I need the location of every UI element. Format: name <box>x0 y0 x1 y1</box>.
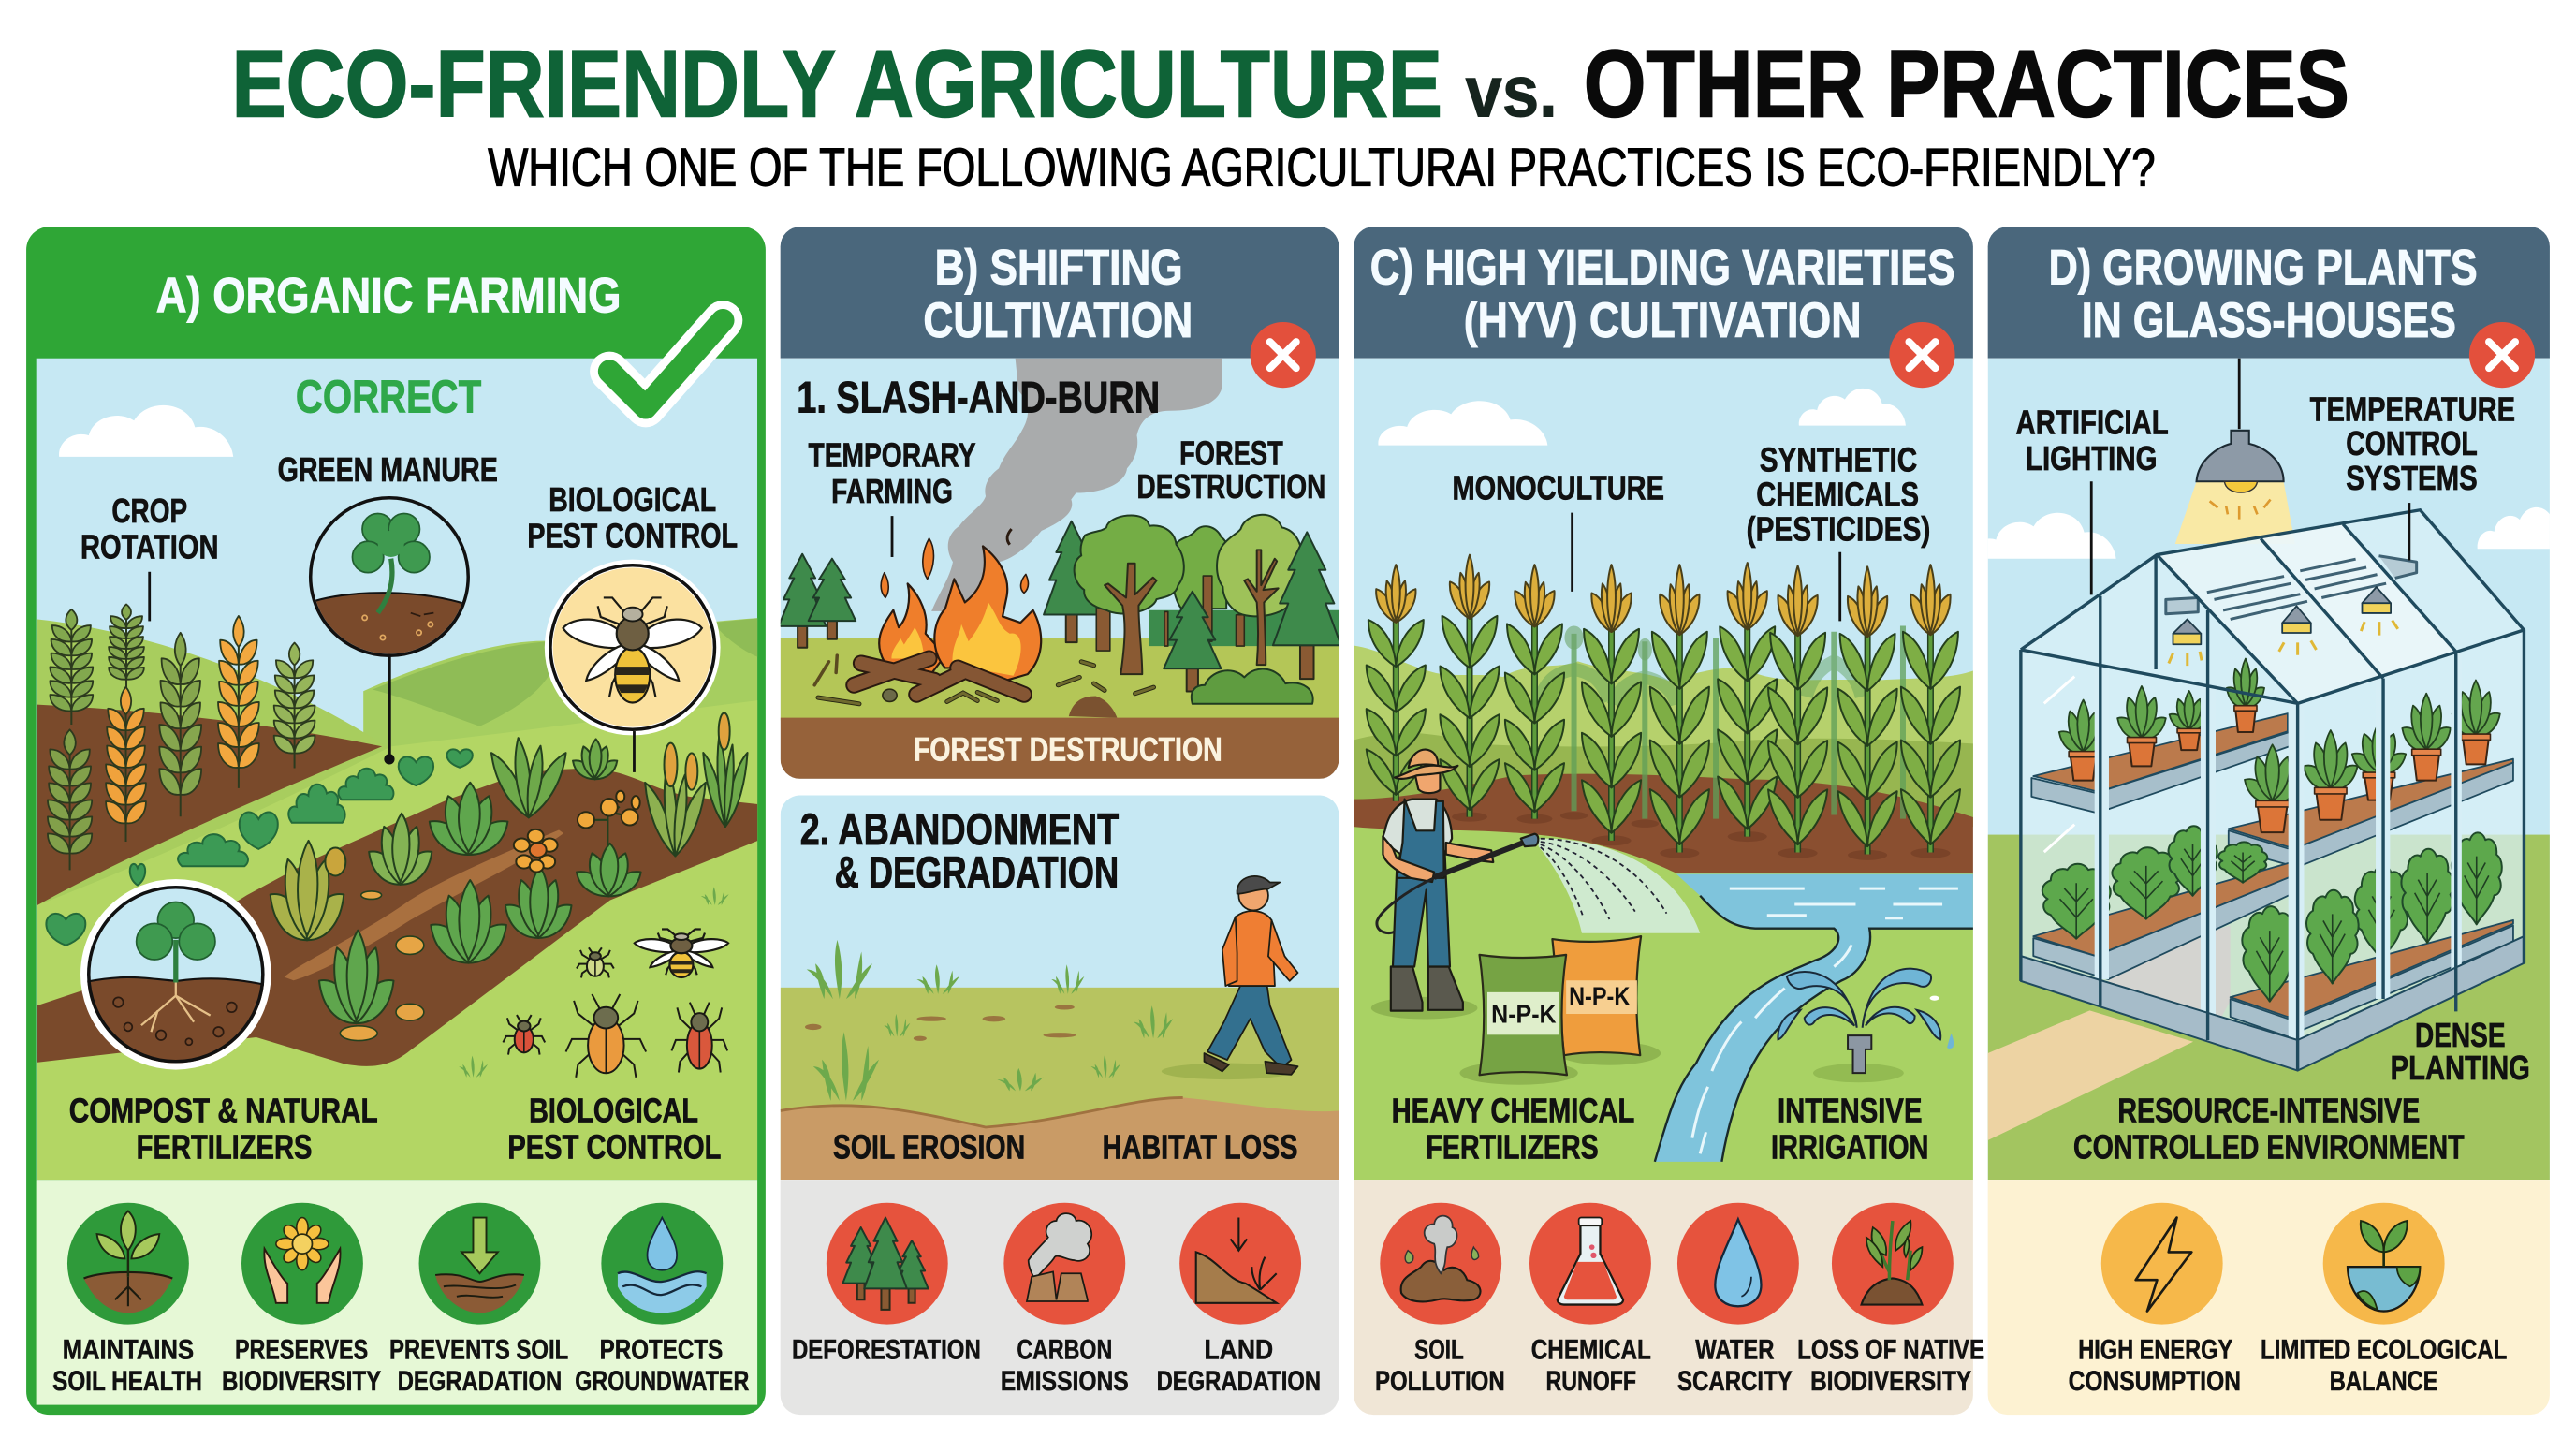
panel C impacts strip <box>1354 1180 1984 1415</box>
label: forest destruction: DESTRUCTION <box>1137 467 1325 506</box>
impact labels: SOIL <box>1414 1334 1464 1365</box>
panel: B shifting cultivation <box>779 227 1341 1415</box>
panel B header: CULTIVATION <box>923 293 1193 348</box>
label: intensive irrigation <box>1771 1092 1928 1166</box>
label: heavy chemical fertilizers: FERTILIZERS <box>1426 1127 1599 1166</box>
frame <box>2021 510 2524 1071</box>
panel C header: C) HIGH YIELDING VARIETIES <box>1370 241 1955 296</box>
label: monoculture: MONOCULTURE <box>1453 469 1664 507</box>
abandonment scene <box>781 795 1339 1180</box>
impact labels: LAND <box>1204 1334 1273 1365</box>
label: intensive irrigation: INTENSIVE <box>1778 1092 1922 1130</box>
label: compost and natural fertilizers: FERTILIZERS <box>137 1127 312 1166</box>
logs <box>814 655 1153 704</box>
label: temperature control systems: TEMPERATURE <box>2310 389 2515 428</box>
label: forest destruction strip: FOREST DESTRUCTION <box>914 732 1222 769</box>
lettuce rows <box>2042 826 2502 1002</box>
panel: A organic farming <box>26 227 766 1415</box>
panel A scene <box>37 359 764 1201</box>
fertilizer bags: N-P-K <box>1491 1000 1557 1029</box>
icon: deforestation <box>827 1203 948 1325</box>
icon: soil pollution <box>1380 1203 1501 1325</box>
impact labels: CHEMICAL <box>1531 1334 1651 1365</box>
label: temporary farming: TEMPORARY <box>809 435 976 474</box>
label: heavy chemical fertilizers <box>1392 1092 1634 1166</box>
label: crop rotation: CROP <box>111 492 187 530</box>
hanging lamps <box>2169 587 2398 666</box>
impact labels: CARBON <box>1017 1334 1112 1365</box>
impact labels: CONSUMPTION <box>2069 1366 2241 1397</box>
icon: maintains soil health <box>67 1203 189 1325</box>
label: temperature control systems <box>2310 389 2515 560</box>
label: synthetic chemicals: SYNTHETIC <box>1760 441 1917 479</box>
soil patches <box>805 1005 1076 1041</box>
label: forest destruction <box>1137 434 1325 506</box>
impact labels: LOSS OF NATIVE <box>1797 1334 1984 1365</box>
label: biological pest control: PEST CONTROL <box>527 516 738 554</box>
label: resource intensive environment <box>2073 1092 2465 1166</box>
ceiling lamp <box>2197 359 2284 520</box>
heading: abandonment and degradation <box>800 805 1119 898</box>
label: intensive irrigation: IRRIGATION <box>1771 1127 1928 1166</box>
panel D header <box>2049 241 2478 348</box>
panel D header: D) GROWING PLANTS <box>2049 241 2478 296</box>
benefit labels: PRESERVES <box>235 1334 368 1365</box>
benefit labels: BIODIVERSITY <box>222 1366 381 1397</box>
label: artificial lighting: ARTIFICIAL <box>2016 403 2169 441</box>
benefit labels: MAINTAINS <box>63 1334 194 1365</box>
label: dense planting: PLANTING <box>2391 1049 2530 1087</box>
icon: limited ecological balance <box>2323 1203 2445 1325</box>
icon: red x <box>1889 322 1955 388</box>
person walking <box>1204 876 1298 1075</box>
label: temperature control systems: CONTROL <box>2346 424 2478 462</box>
panel C scene <box>1354 358 1973 1180</box>
glass mullion highlights <box>2095 653 2462 1040</box>
smoke <box>931 359 1222 611</box>
icon: red x <box>2469 322 2535 388</box>
icon: clover circle <box>309 496 470 657</box>
impact labels: SCARCITY <box>1677 1366 1793 1397</box>
impact labels: BALANCE <box>2330 1366 2438 1397</box>
greenhouse <box>2021 510 2524 1071</box>
correct label: CORRECT <box>296 373 481 423</box>
benefit labels: DEGRADATION <box>398 1366 562 1397</box>
icon: red x <box>1251 322 1316 388</box>
label: biological pest control <box>527 480 738 554</box>
icon: chemical runoff <box>1530 1203 1651 1325</box>
label: crop rotation <box>80 492 218 621</box>
panel B header: B) SHIFTING <box>935 241 1183 296</box>
label: temporary farming: FARMING <box>831 472 953 510</box>
label: forest destruction: FOREST <box>1179 434 1283 473</box>
panel: D glass houses <box>1971 227 2576 1415</box>
benefit labels <box>52 1334 749 1397</box>
insects <box>459 887 729 1078</box>
light cone <box>2175 481 2295 544</box>
heading: slash and burn: 1. SLASH-AND-BURN <box>797 374 1160 423</box>
farmer spraying <box>1371 750 1538 1019</box>
label: resource intensive environment: CONTROLLED ENVIRONMENT <box>2073 1127 2465 1166</box>
impact labels: HIGH ENERGY <box>2078 1334 2232 1365</box>
panel C header: (HYV) CULTIVATION <box>1464 293 1862 348</box>
impact labels <box>2069 1334 2507 1397</box>
panel B impacts strip <box>781 1180 1339 1415</box>
label: biological pest control lower <box>507 1092 721 1166</box>
fertilizer bags: N-P-K <box>1569 981 1630 1010</box>
icon: land degradation <box>1179 1203 1301 1325</box>
label: dense planting: DENSE <box>2415 1016 2506 1054</box>
label: synthetic chemicals: (PESTICIDES) <box>1747 509 1930 548</box>
label: dense planting <box>2391 1016 2530 1087</box>
forest trees <box>779 515 1341 704</box>
shelves lower <box>2033 863 2513 1036</box>
benefit labels: PROTECTS <box>600 1334 723 1365</box>
benefit labels: PREVENTS SOIL <box>389 1334 568 1365</box>
icon: compost soil circle <box>82 882 271 1068</box>
panel B header <box>923 241 1193 348</box>
leader: green manure <box>384 655 395 764</box>
label: crop rotation: ROTATION <box>80 528 218 566</box>
icon: bee circle <box>549 564 716 772</box>
crop rotation plants <box>48 604 315 870</box>
sprinkler <box>1778 969 1954 1082</box>
icon: check mark <box>609 320 723 407</box>
heading: abandonment and degradation: 2. ABANDONMENT <box>800 805 1119 855</box>
label: temporary farming <box>809 435 976 557</box>
panel A header: A) ORGANIC FARMING <box>156 268 621 323</box>
icon: protects groundwater <box>601 1203 723 1325</box>
label: synthetic chemicals <box>1747 441 1930 621</box>
title: OTHER PRACTICES <box>1584 31 2349 138</box>
label: biological pest control lower: BIOLOGICAL <box>529 1092 698 1130</box>
label: resource intensive environment: RESOURCE-INTENSIVE <box>2117 1092 2420 1130</box>
impact labels: DEGRADATION <box>1157 1366 1321 1397</box>
label: temperature control systems: SYSTEMS <box>2346 459 2478 497</box>
icon: loss of native biodiversity <box>1832 1203 1954 1325</box>
label: artificial lighting <box>2016 403 2169 594</box>
background corn <box>1539 625 1903 819</box>
icon: carbon emissions <box>1003 1203 1125 1325</box>
impact labels: WATER <box>1695 1334 1775 1365</box>
subtitle question: WHICH ONE OF THE FOLLOWING AGRICULTURAI PRACTICES IS ECO-FRIENDLY? <box>488 138 2156 198</box>
title <box>231 31 2349 138</box>
fertilizer bags <box>1459 936 1661 1085</box>
icon: high energy <box>2101 1203 2223 1325</box>
panel: C high yielding varieties <box>1354 227 1984 1415</box>
heading: abandonment and degradation: & DEGRADATION <box>835 848 1119 898</box>
label: biological pest control: BIOLOGICAL <box>549 480 716 519</box>
fire <box>879 529 1041 681</box>
panel C header <box>1370 241 1955 348</box>
soil mounds <box>1452 812 1950 860</box>
panel D impacts strip <box>1988 1180 2550 1415</box>
impact labels <box>1375 1334 1984 1397</box>
impact labels: DEFORESTATION <box>792 1334 981 1365</box>
grass tufts <box>807 940 1173 1101</box>
panel D scene <box>1971 359 2576 1180</box>
impact labels: EMISSIONS <box>1001 1366 1129 1397</box>
label: heavy chemical fertilizers: HEAVY CHEMICAL <box>1392 1092 1634 1130</box>
label: artificial lighting: LIGHTING <box>2026 439 2157 477</box>
label: soil erosion: SOIL EROSION <box>833 1127 1025 1166</box>
icon: prevents soil degradation <box>419 1203 540 1325</box>
impact labels <box>792 1334 1321 1397</box>
label: synthetic chemicals: CHEMICALS <box>1756 476 1919 514</box>
roof vents <box>2166 556 2417 619</box>
impact labels: RUNOFF <box>1546 1366 1636 1397</box>
benefit labels: SOIL HEALTH <box>52 1366 202 1397</box>
label: habitat loss: HABITAT LOSS <box>1103 1127 1298 1166</box>
benefit labels: GROUNDWATER <box>575 1366 749 1397</box>
panel D header: IN GLASS-HOUSES <box>2082 293 2456 348</box>
field crops <box>271 713 748 1041</box>
shelves upper <box>2031 713 2513 865</box>
spray mist <box>1539 839 1700 933</box>
impact labels: LIMITED ECOLOGICAL <box>2261 1334 2507 1365</box>
label: compost and natural fertilizers: COMPOST & NATURAL <box>69 1092 378 1130</box>
panel A benefits strip <box>37 1180 757 1405</box>
base frame <box>2021 956 2298 1071</box>
icon: preserves biodiversity <box>242 1203 363 1325</box>
potted plants <box>2059 659 2500 832</box>
label: green manure: GREEN MANURE <box>278 450 498 489</box>
impact labels: BIODIVERSITY <box>1810 1366 1971 1397</box>
title: ECO-FRIENDLY AGRICULTURE <box>231 31 1442 138</box>
green manure ground cover <box>46 749 473 946</box>
label: compost and natural fertilizers <box>69 1092 378 1166</box>
slash and burn scene <box>779 359 1341 780</box>
impact labels: POLLUTION <box>1375 1366 1505 1397</box>
title: vs. <box>1466 52 1558 133</box>
icon: water scarcity <box>1677 1203 1799 1325</box>
corn crop row <box>1367 555 1960 855</box>
label: biological pest control lower: PEST CONTROL <box>507 1127 721 1166</box>
